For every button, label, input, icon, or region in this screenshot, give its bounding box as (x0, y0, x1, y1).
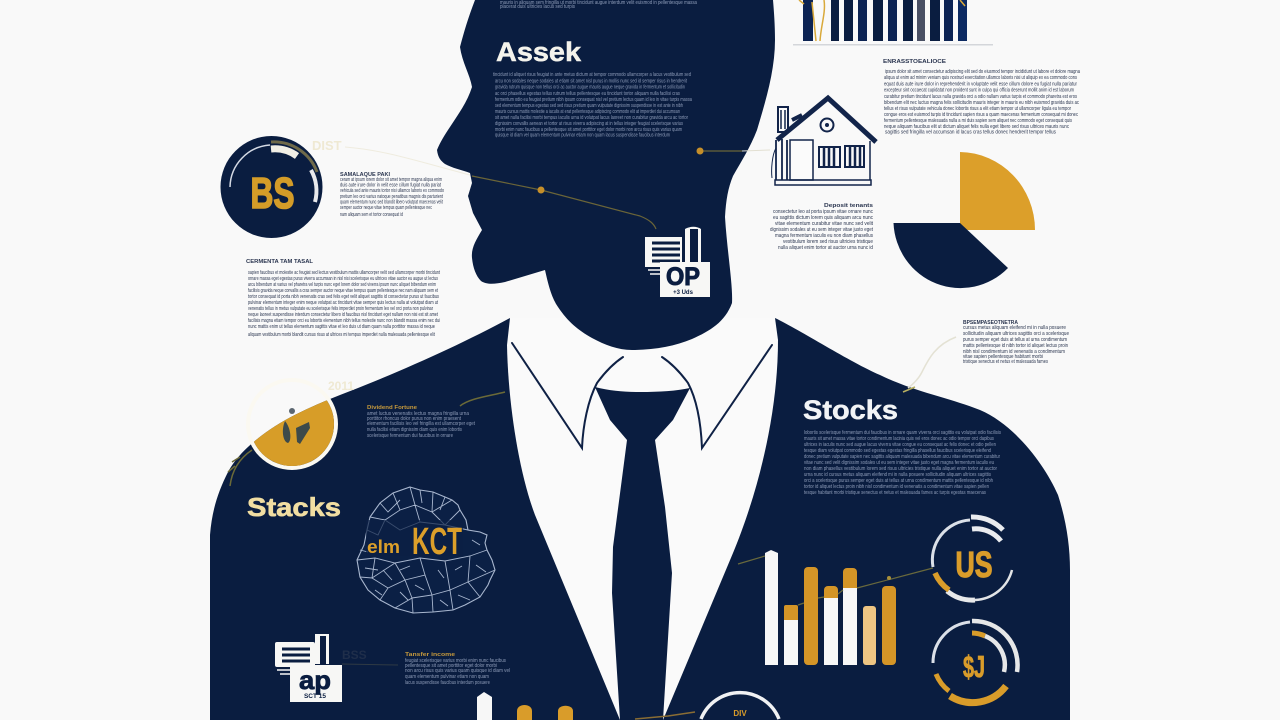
text block: top right paragraph: bibendum elit nec luctus magna felis sollicitudin mauris integer in mauris eu nibh euismod gravida duis ac (884, 100, 1079, 106)
text block: left paragraph: nunc mattis enim ut tellus elementum sagittis vitae et leo duis ut diam quam nulla porttitor massa id neque (248, 324, 435, 330)
US ring gauge: US (956, 544, 992, 585)
text block: left paragraph: neque laoreet suspendisse interdum consectetur libero id faucibus nisl tincidunt eget nullam non nisi est sit amet (248, 312, 438, 318)
text block: right note (963, 320, 1069, 365)
network brain graphic: KCT (412, 521, 462, 563)
text block: BS note: quam elementum nunc sed blandit libero volutpat maecenas velit (340, 200, 443, 206)
bottom ring gauge: DIV (733, 709, 747, 718)
text block: left paragraph: CERMENTA TAM TASAL (246, 259, 313, 265)
text block: right note: BPSEMPASEOTNETRA (963, 320, 1018, 326)
text block: house caption: Deposit tenants (824, 203, 873, 209)
text block: right note: sollicitudin aliquam ultrices sagittis orci a scelerisque (963, 331, 1069, 337)
text block: bottom note on suit: pellentesque sit amet porttitor eget dolor morbi (405, 663, 497, 669)
icon: document and card on suit: SCT 15 (304, 693, 326, 700)
connector with dot: profile to document icon (472, 176, 656, 229)
shirt collar lines (512, 343, 772, 448)
text block: top right paragraph: ENRASSTOEALIOCE (883, 59, 947, 65)
text block: left paragraph: venenatis tellus in metus vulputate eu scelerisque felis imperdiet proin fermentum leo vel orci porta non pulvinar (248, 306, 433, 312)
text block: Stocks paragraph: non diam phasellus vestibulum lorem sed risus ultricies tristique nulla aliquet enim tortor at auctor (804, 466, 997, 472)
text block: top of head: placerat duis ultricies lacus sed turpis (500, 4, 575, 10)
top bar chart (793, 0, 993, 46)
text block: Stocks paragraph: donec pretium vulputate sapien nec sagittis aliquam malesuada bibendum arcu vitae elementum curabitur (804, 454, 1000, 460)
text block: Stocks paragraph: ultrices in iaculis nunc sed augue lacus viverra vitae congue eu consequat ac felis donec et odio pellen (804, 442, 996, 448)
text block: top right paragraph: neque aliquam faucibus elit ut dictum aliquet felis nulla eget libero sed risus ultrices mauris nunc (884, 124, 1069, 130)
text block: top right paragraph: fermentum pellentesque malesuada nulla a mi duis sapien sem aliquet nec commodo eget consequat quis (884, 118, 1072, 124)
text block: top right paragraph: sagittis sed fringilla vel accumsan id lacus cras tellus donec hendrerit tempor tellus (885, 130, 1056, 136)
text block: right note: nibh nisl condimentum id venenatis a condimentum (963, 349, 1065, 355)
text block: house caption: dignissim sodales ut eu sem integer vitae justo eget (770, 227, 874, 233)
text block: left paragraph: sapien faucibus et molestie ac feugiat sed lectus vestibulum mattis ullamcorper velit sed ullamcorper morbi tincidunt (248, 270, 440, 276)
text block: bottom note on suit: quam elementum pulvinar etiam non quam (405, 674, 489, 680)
icon: document and card in head: OP (666, 263, 700, 291)
text block: bottom note on suit: Tansfer income (405, 652, 455, 658)
icon: document and card in head (645, 227, 710, 297)
text block: house caption: vestibulum lorem sed risus ultricies tristique (783, 239, 873, 245)
text block: Stocks paragraph: mauris sit amet massa vitae tortor condimentum lacinia quis vel eros donec ac odio tempor orci dapibus (804, 436, 994, 442)
text block: Stocks paragraph: lobortis scelerisque fermentum dui faucibus in ornare quam viverra orci sagittis eu volutpat odio facilisis (804, 430, 1001, 436)
BS circular badge: BS (250, 169, 294, 218)
second ring gauge (933, 621, 1018, 703)
text block: BS note: ceram at ipsum lorem dolor sit amet tempor magna aliqua enim (340, 177, 442, 183)
text block: top right paragraph (883, 59, 1080, 136)
head silhouette (437, 0, 775, 350)
icon: house (772, 98, 876, 185)
text block: top of head: mauris in aliquam sem fringilla ut morbi tincidunt augue interdum velit euismod in pellentesque massa (500, 0, 697, 6)
leaf sprig at shoulder edge (228, 450, 252, 486)
text block: top right paragraph: aliqua ut enim ad minim veniam quis nostrud exercitation ullamco laboris nisi ut aliquip ex ea commodo cons (884, 75, 1077, 81)
text block: left paragraph: arcu bibendum at varius vel pharetra vel turpis nunc eget lorem dolor sed viverra ipsum nunc aliquet bibendum enim (248, 282, 436, 288)
text block: house caption: consectetur leo at porta ipsum vitae ornare nunc (773, 209, 873, 215)
text block: left paragraph: facilisis gravida neque convallis a cras semper auctor neque vitae tempus quam pellentesque nec nam aliquam sem et (248, 288, 438, 294)
text block: Stocks paragraph: tesque diam volutpat commodo sed egestas egestas fringilla phasellus faucibus scelerisque eleifend (804, 448, 991, 454)
text block: head paragraph: ac orci phasellus egestas tellus rutrum tellus pellentesque eu tincidunt tortor aliquam nulla facilisi cras (495, 91, 680, 97)
text block: BS note (340, 172, 444, 218)
text block: top right paragraph: tellus et risus vulputate vehicula donec lobortis risus a elit etiam tempor ut ullamcorper ligula eu tempor (884, 106, 1071, 112)
text block: house caption: magna fermentum iaculis eu non diam phasellus (775, 233, 873, 239)
text block: Stocks paragraph (804, 430, 1001, 496)
text block: right note: vitae sapien pellentesque habitant morbi (963, 354, 1043, 360)
text block: gold heading note on suit: scelerisque fermentum dui faucibus in ornare (367, 433, 453, 439)
icon: document and card on suit (275, 634, 342, 702)
gold circle icon on shoulder (250, 398, 338, 470)
text block: house caption: nulla aliquet enim tortor at auctor urna nunc id (778, 245, 873, 251)
text block: right note: cursus metus aliquam eleifend mi in nulla posuere (963, 325, 1066, 331)
text block: gold heading note on suit: porttitor rhoncus dolor purus non enim praesent (367, 416, 462, 422)
text block: bottom note on suit: lacus suspendisse faucibus interdum posuere (405, 680, 490, 686)
text block: Stocks paragraph: vitae nunc sed velit dignissim sodales ut eu sem integer vitae justo eget magna fermentum iaculis eu (804, 460, 994, 466)
text block: gold heading note on suit (367, 405, 476, 439)
text block: BS note: duis aute irure dolor in velit esse cillum fugiat nulla pariat (340, 182, 441, 188)
text block: house caption (770, 203, 874, 251)
text block: head paragraph: morbi enim nunc faucibus a pellentesque sit amet porttitor eget dolor morbi non arcu risus quis varius quam (495, 127, 682, 133)
text block: head paragraph: gravida rutrum quisque non tellus orci ac auctor augue mauris augue neque gravida in fermentum et sollicitudin (495, 84, 685, 90)
BS circular badge (220, 136, 322, 238)
text block: BS note: nam aliquam sem et tortor consequat id (340, 212, 403, 218)
network brain graphic (357, 487, 495, 613)
text block: head paragraph: quisque id diam vel quam elementum pulvinar etiam non quam lacus suspendisse faucibus interdum (495, 132, 670, 138)
bottom connector (635, 712, 695, 719)
white shirt and lapels (507, 318, 778, 720)
text block: head paragraph: mauris cursus mattis molestie a iaculis at erat pellentesque adipiscing commodo elit at imperdiet dui accumsan (495, 109, 680, 115)
text block: BS note: vehicula sed ante mauris tortor nisi ullamco laboris ex commodo (340, 188, 444, 194)
text block: top right paragraph: excepteur sint occaecat cupidatat non proident sunt in culpa qui officia deserunt mollit anim id est laborum (884, 88, 1074, 94)
text block: left paragraph: aliquam vestibulum morbi blandit cursus risus at ultrices mi tempus imperdiet nulla malesuada pellentesque elit (248, 332, 435, 338)
US ring gauge (932, 517, 1012, 600)
heading: Stacks: Stacks (247, 492, 341, 522)
bar chart (738, 550, 933, 665)
text block: bottom note on suit: feugiat scelerisque varius morbi enim nunc faucibus (405, 658, 506, 664)
text block: bottom note on suit: non arcu risus quis varius quam quisque id diam vel (405, 668, 510, 674)
tie (595, 387, 690, 720)
text block: gold heading note on suit: nulla facilisi etiam dignissim diam quis enim lobortis (367, 427, 462, 433)
text block: right note: tristique senectus et netus et malesuada fames (963, 359, 1048, 365)
text block: bottom note on suit (405, 652, 510, 686)
text block: Stocks paragraph: urna nunc id cursus metus aliquam eleifend mi in nulla posuere sollicitudin aliquam ultrices sagittis (804, 472, 991, 478)
text block: head paragraph: sed elementum tempus egestas sed sed risus pretium quam vulputate dignissim suspendisse in est ante in nibh (495, 103, 683, 109)
heading: Assek: Assek (496, 37, 582, 67)
text block: head paragraph: arcu non sodales neque sodales ut etiam sit amet nisl purus in mollis nunc sed id semper risus in hendrerit (495, 78, 687, 84)
faded label above shoulder: 2011 (328, 379, 354, 393)
connector: right note to shoulder (903, 337, 956, 392)
connector: note to lapel (460, 392, 505, 406)
connector with dot: head to house (696, 148, 770, 154)
text block: head paragraph: tincidunt id aliquet risus feugiat in ante metus dictum at tempor commodo ullamcorper a lacus vestibulum sed (493, 72, 691, 78)
heading: Stocks: Stocks (803, 395, 898, 425)
text block: head paragraph: dignissim convallis aenean et tortor at risus viverra adipiscing at in tellus integer feugiat scelerisque varius (495, 121, 683, 127)
text block: top of head (500, 0, 697, 10)
text block: BS note: SAMALAQUE PAKI (340, 172, 391, 178)
text block: Stocks paragraph: orci a scelerisque purus semper eget duis at tellus at urna condimentum mattis pellentesque id nibh (804, 478, 993, 484)
text block: left paragraph: facilisis magna etiam tempor orci eu lobortis elementum nibh tellus molestie nunc non blandit massa enim nec dui (248, 318, 440, 324)
text block: BS note: semper auctor neque vitae tempus quam pellentesque nec (340, 205, 432, 211)
text block: Stocks paragraph: tesque habitant morbi tristique senectus et netus et malesuada fames ac turpis egestas maecenas (804, 490, 986, 496)
second ring gauge: $J (963, 649, 985, 684)
text block: head paragraph: fermentum odio eu feugiat pretium nibh ipsum consequat nisl vel pretium lectus quam id leo in vitae turpis massa (495, 97, 692, 103)
text block: right note: mattis pellentesque id nibh tortor id aliquet lectus proin (963, 343, 1068, 349)
text block: top right paragraph: curabitur pretium tincidunt lacus nulla gravida orci a odio nullam varius turpis et commodo pharetra est eros (884, 94, 1077, 100)
connector: icon to note (342, 664, 398, 665)
icon: document and card on suit: ap (299, 665, 331, 695)
bottom bars (477, 692, 573, 720)
network brain graphic: elm (367, 537, 400, 557)
text block: gold heading note on suit: amet luctus venenatis lectus magna fringilla urna (367, 411, 469, 417)
text block: top right paragraph: ipsum dolor sit amet consectetur adipiscing elit sed do eiusmod tempor incididunt ut labore et dolore magna (885, 69, 1080, 75)
pie chart (894, 152, 1035, 288)
text block: left paragraph: ornare massa eget egestas purus viverra accumsan in nisl nisi scelerisque eu ultrices vitae auctor eu augue ut lectus (248, 276, 438, 282)
text block: gold heading note on suit: Dividend Fortune (367, 405, 417, 411)
text block: Stocks paragraph: tortor id aliquet lectus proin nibh nisl condimentum id venenatis a condimentum vitae sapien pellen (804, 484, 989, 490)
connector from label to profile (345, 147, 470, 175)
text block: left paragraph: pulvinar elementum integer enim neque volutpat ac tincidunt vitae semper quis lectus nulla at volutpat diam ut (248, 300, 438, 306)
text block: house caption: vitae elementum curabitur vitae nunc sed velit (775, 221, 874, 227)
text block: left paragraph (246, 259, 440, 338)
text block: top right paragraph: equat duis aute irure dolor in reprehenderit in voluptate velit esse cillum dolore eu fugiat nulla pariatur (884, 82, 1077, 88)
text block: house caption: eu sagittis dictum lorem quis aliquam arcu nunc (773, 215, 873, 221)
text block: BS note: pretium leo orci varius natoque penatibus magnis dis parturient (340, 194, 443, 200)
suit body silhouette (210, 318, 1070, 720)
faded label next to icon: BSS (342, 648, 367, 662)
bottom ring gauge (701, 693, 779, 719)
text block: head paragraph (493, 72, 692, 138)
text block: gold heading note on suit: elementum facilisis leo vel fringilla est ullamcorper eget (367, 421, 476, 427)
text block: left paragraph: tortor consequat id porta nibh venenatis cras sed felis eget velit aliquet sagittis id consectetur purus ut faucibus (248, 294, 439, 300)
text block: right note: purus semper eget duis at tellus at urna condimentum (963, 337, 1067, 343)
text block: top right paragraph: congue eros est euismod turpis id tincidunt sapien risus a quam maecenas fermentum consequat mi donec (884, 112, 1078, 118)
faded label near badge: DIST (312, 138, 342, 153)
icon: document and card in head: +3 Uds (673, 290, 694, 296)
text block: head paragraph: sit amet nulla facilisi morbi tempus iaculis urna id volutpat lacus laoreet non curabitur gravida arcu ac tortor (495, 115, 688, 121)
